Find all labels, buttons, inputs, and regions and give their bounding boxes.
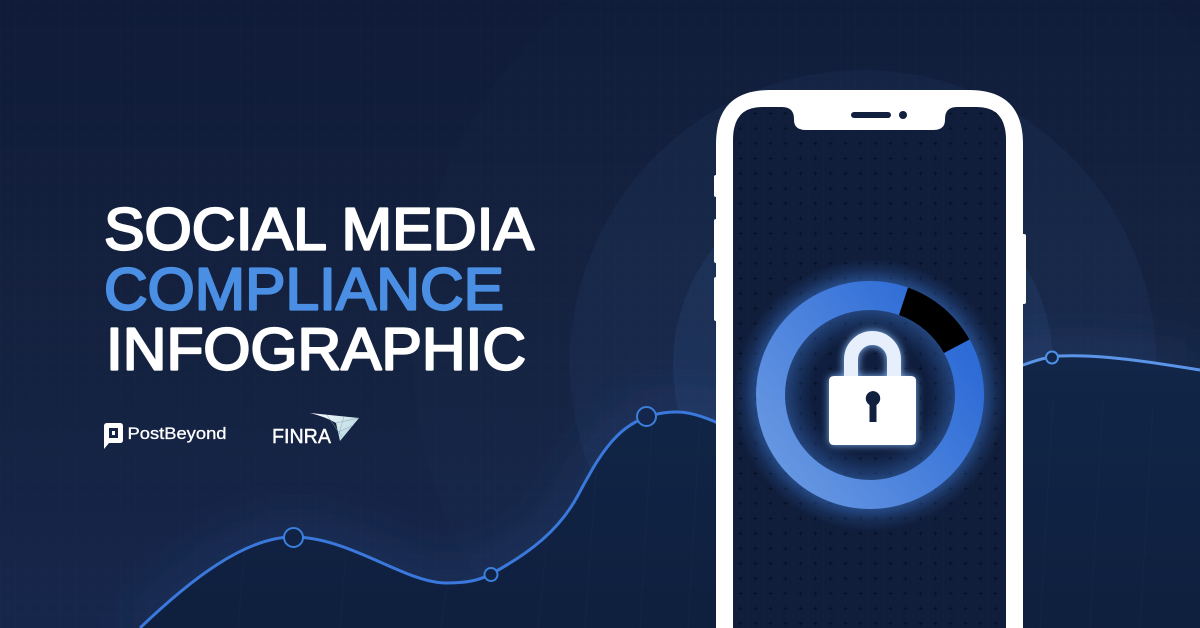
logo: FINRA: FINRA bbox=[272, 425, 331, 448]
data point bbox=[637, 407, 656, 426]
phone side buttons bbox=[714, 175, 1026, 321]
padlock bbox=[829, 338, 916, 445]
logo: FINRA bbox=[272, 413, 359, 448]
line chart left bbox=[140, 407, 720, 628]
data point bbox=[284, 528, 303, 547]
data point bbox=[484, 568, 498, 581]
phone body bbox=[716, 90, 1023, 628]
data point bbox=[1046, 352, 1058, 364]
camera bbox=[899, 111, 907, 119]
progress ring bbox=[770, 288, 970, 494]
title: COMPLIANCE bbox=[104, 256, 504, 322]
logo: PostBeyond bbox=[104, 423, 226, 449]
title: SOCIAL MEDIA bbox=[104, 196, 535, 262]
logo: PostBeyond: PostBeyond bbox=[128, 424, 226, 443]
speaker bbox=[851, 112, 891, 118]
title bbox=[104, 196, 535, 382]
phone bbox=[714, 90, 1026, 628]
black ring segment bbox=[899, 288, 970, 353]
ring glow bbox=[734, 259, 1006, 531]
keyhole bbox=[866, 391, 880, 422]
title: INFOGRAPHIC bbox=[106, 316, 526, 382]
line chart right bbox=[1020, 352, 1200, 370]
phone screen bbox=[733, 107, 1006, 628]
